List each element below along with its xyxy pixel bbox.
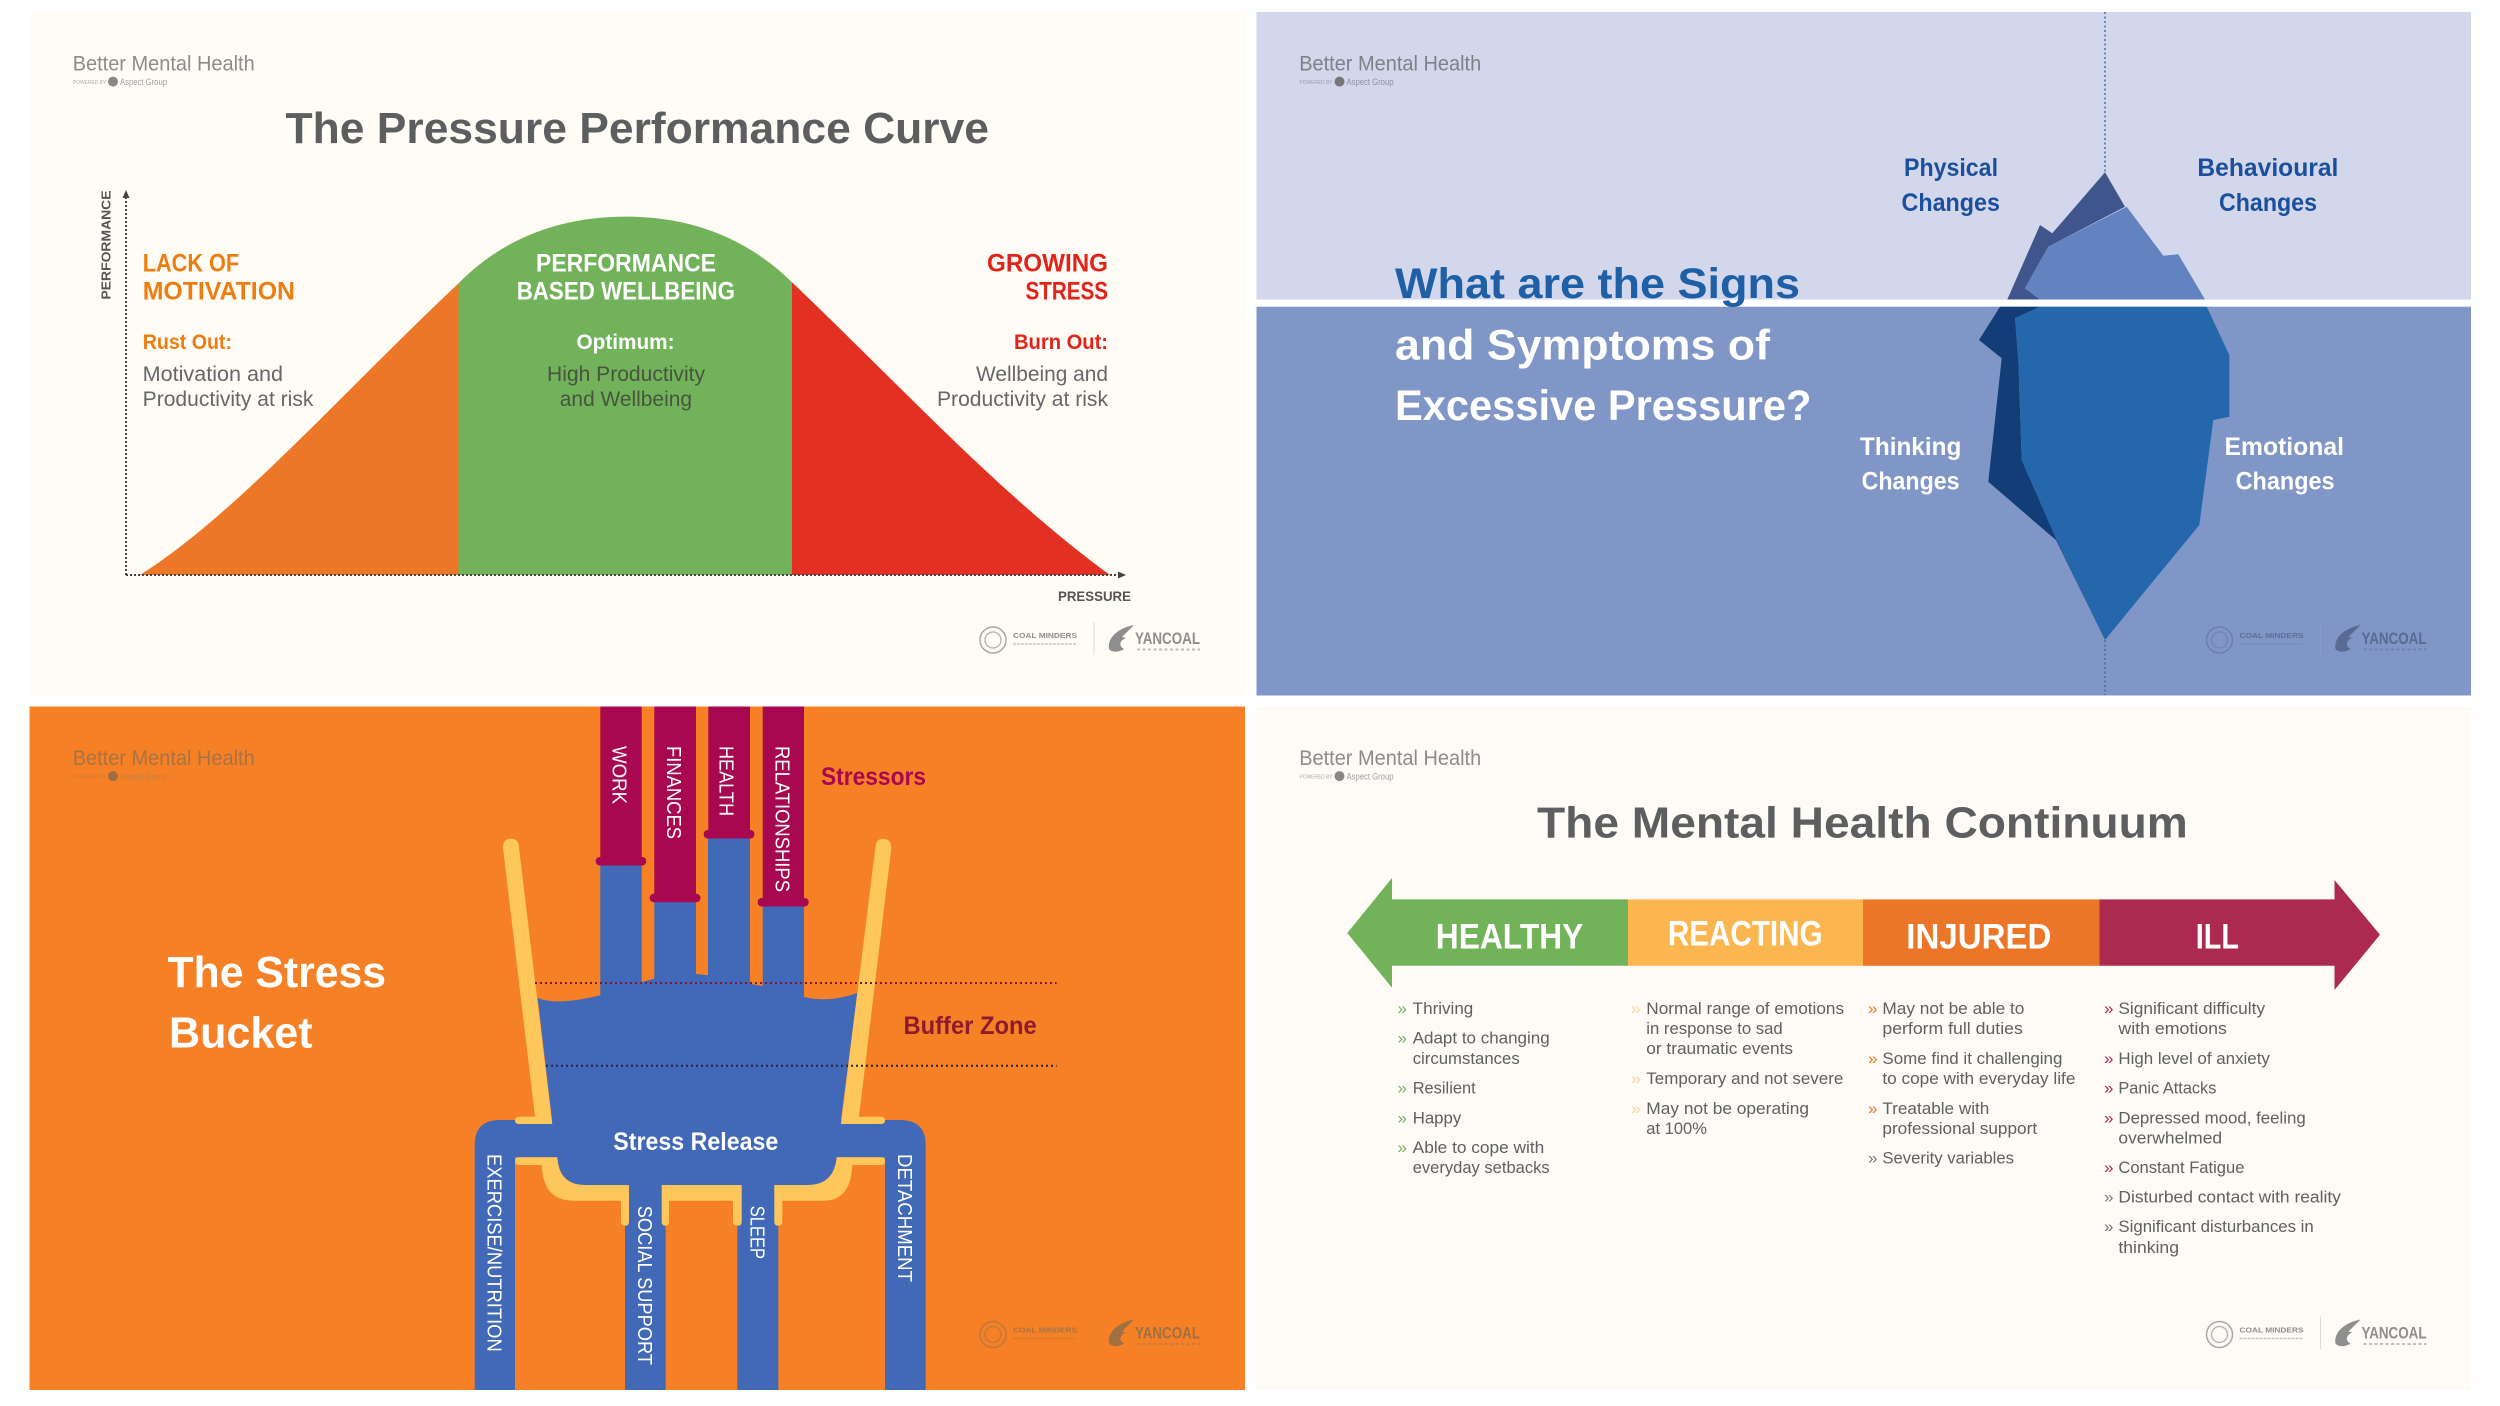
text block: lack of motivation: Motivation and xyxy=(143,363,283,386)
segment: reacting xyxy=(1628,899,1863,966)
brand header xyxy=(73,53,255,87)
segment: injured: INJURED xyxy=(1906,917,2051,956)
dotted vertical axis xyxy=(2104,12,2106,695)
label: behavioural changes xyxy=(2197,154,2338,217)
list: ill: » xyxy=(2104,1108,2113,1127)
brand header: POWERED BY xyxy=(1300,80,1333,86)
label: physical changes: Physical xyxy=(1904,154,1998,182)
list: ill: Depressed mood, feeling xyxy=(2118,1108,2306,1127)
list: ill xyxy=(2104,999,2341,1257)
text block: performance based wellbeing: BASED WELLBEING xyxy=(517,278,735,306)
release labels: EXERCISE/NUTRITION xyxy=(483,1154,505,1352)
continuum arrow xyxy=(1347,878,2380,990)
brand header: Better Mental Health xyxy=(73,747,255,770)
release labels: SLEEP xyxy=(746,1206,768,1259)
partner logos: YANCOAL xyxy=(2362,1324,2426,1342)
text block: lack of motivation: MOTIVATION xyxy=(143,278,295,306)
list: injured: Some find it challenging xyxy=(1882,1049,2062,1068)
iceberg illustration xyxy=(1979,172,2229,640)
list: healthy: everyday setbacks xyxy=(1413,1158,1550,1177)
list: injured: » xyxy=(1868,1148,1877,1168)
list: healthy: » xyxy=(1398,1028,1407,1047)
label: emotional changes: Emotional xyxy=(2224,433,2344,461)
list: ill: » xyxy=(2104,1049,2113,1068)
label: thinking changes: Changes xyxy=(1862,468,1960,496)
list: injured: to cope with everyday life xyxy=(1882,1069,2075,1088)
partner logos xyxy=(980,622,1200,655)
title xyxy=(1395,260,1811,430)
brand header: Aspect Group xyxy=(1346,772,1394,782)
list: reacting: Normal range of emotions xyxy=(1646,999,1844,1018)
text block: performance based wellbeing xyxy=(517,249,735,411)
list: ill: overwhelmed xyxy=(2118,1128,2222,1147)
text block: lack of motivation: LACK OF xyxy=(143,249,239,277)
list: injured: Treatable with xyxy=(1882,1099,1989,1118)
title: and Symptoms of xyxy=(1395,322,1771,370)
list: ill: » xyxy=(2104,1078,2113,1097)
list: ill: » xyxy=(2104,999,2113,1018)
list: ill: Panic Attacks xyxy=(2118,1078,2216,1097)
brand header: Better Mental Health xyxy=(1299,747,1481,770)
list: injured: perform full duties xyxy=(1882,1019,2023,1038)
pipe: relationships: RELATIONSHIPS xyxy=(771,746,793,892)
list: reacting: in response to sad xyxy=(1646,1019,1783,1038)
panel: pressure performance curve xyxy=(30,12,1245,696)
list: ill: » xyxy=(2104,1188,2113,1206)
text block: growing stress: STRESS xyxy=(1026,278,1108,306)
brand header: Better Mental Health xyxy=(1299,53,1481,76)
text block: growing stress xyxy=(937,249,1108,411)
partner logos xyxy=(2206,622,2426,655)
title: The Mental Health Continuum xyxy=(1537,798,2188,848)
segment: reacting: REACTING xyxy=(1668,915,1823,954)
pipe: work xyxy=(596,706,646,866)
list: reacting: Temporary and not severe xyxy=(1646,1069,1843,1088)
brand header: POWERED BY xyxy=(1300,774,1333,780)
partner logos: COAL MINDERS xyxy=(2240,1326,2304,1334)
text block: lack of motivation: Productivity at risk xyxy=(143,388,314,411)
brand header: Aspect Group xyxy=(120,77,167,87)
label: emotional changes: Changes xyxy=(2236,468,2335,496)
list: ill: » xyxy=(2104,1217,2113,1236)
list: healthy: Thriving xyxy=(1413,999,1473,1018)
partner logos: YANCOAL xyxy=(1135,629,1200,648)
label: stressors: Stressors xyxy=(821,763,926,791)
label: thinking changes: Thinking xyxy=(1860,433,1961,461)
list: healthy: » xyxy=(1398,1108,1407,1127)
list: healthy xyxy=(1398,999,1550,1177)
brand header: POWERED BY xyxy=(73,80,107,86)
label: physical changes: Changes xyxy=(1902,189,2000,217)
list: healthy: circumstances xyxy=(1413,1049,1520,1068)
text block: lack of motivation xyxy=(143,249,314,411)
release labels: SOCIAL SUPPORT xyxy=(633,1206,655,1365)
text block: performance based wellbeing: PERFORMANCE xyxy=(536,249,716,277)
title: Bucket xyxy=(169,1008,313,1057)
list: ill: Constant Fatigue xyxy=(2118,1158,2244,1177)
text block: performance based wellbeing: High Productivity xyxy=(547,363,706,386)
brand header: POWERED BY xyxy=(73,774,107,780)
title: Excessive Pressure? xyxy=(1395,382,1811,430)
panel: stress bucket xyxy=(30,706,1245,1390)
bucket walls xyxy=(503,839,891,1226)
list: healthy: Happy xyxy=(1413,1108,1462,1127)
text block: performance based wellbeing: Optimum: xyxy=(576,331,674,354)
pipe: relationships xyxy=(758,706,809,906)
list: ill: with emotions xyxy=(2117,1019,2227,1038)
list: reacting: or traumatic events xyxy=(1646,1039,1793,1058)
label: stress release: Stress Release xyxy=(613,1128,778,1156)
brand header: Aspect Group xyxy=(120,772,167,782)
title: The Stress xyxy=(168,948,386,997)
list: ill: thinking xyxy=(2118,1238,2179,1257)
buffer zone lines xyxy=(535,983,1057,1066)
list: healthy: » xyxy=(1398,1138,1407,1157)
title: The Pressure Performance Curve xyxy=(286,104,989,153)
list: healthy: » xyxy=(1398,999,1407,1018)
label: thinking changes xyxy=(1860,433,1961,496)
list: injured: » xyxy=(1868,999,1877,1018)
panel: iceberg signs and symptoms xyxy=(1256,12,2471,696)
text block: lack of motivation: Rust Out: xyxy=(143,331,232,354)
segment: ill: ILL xyxy=(2196,917,2239,956)
brand header xyxy=(1299,53,1481,87)
list: ill: High level of anxiety xyxy=(2118,1049,2270,1068)
segment: healthy xyxy=(1347,878,1628,988)
brand header xyxy=(1299,747,1481,782)
partner logos xyxy=(2206,1316,2426,1350)
text block: growing stress: Productivity at risk xyxy=(937,388,1108,411)
label: behavioural changes: Behavioural xyxy=(2197,154,2338,182)
pipe: finances: FINANCES xyxy=(662,746,684,839)
stressor pipes xyxy=(596,706,809,906)
label: physical changes xyxy=(1902,154,2000,217)
axis label: pressure: PRESSURE xyxy=(1058,588,1131,604)
pipe: health: HEALTH xyxy=(715,746,737,816)
list: injured: » xyxy=(1868,1049,1877,1068)
list: reacting: May not be operating xyxy=(1646,1099,1809,1118)
list: injured: professional support xyxy=(1882,1119,2037,1138)
list: injured: Severity variables xyxy=(1882,1148,2014,1168)
list: healthy: Adapt to changing xyxy=(1413,1028,1550,1047)
release labels: DETACHMENT xyxy=(893,1154,915,1282)
brand header: Aspect Group xyxy=(1346,77,1394,87)
partner logos: COAL MINDERS xyxy=(1013,1326,1077,1334)
list: healthy: Resilient xyxy=(1413,1078,1476,1097)
list: ill: Significant disturbances in xyxy=(2118,1217,2314,1236)
list: ill: Significant difficulty xyxy=(2118,999,2266,1018)
segment: injured xyxy=(1863,899,2099,966)
label: emotional changes xyxy=(2224,433,2344,496)
list: injured: » xyxy=(1868,1099,1877,1118)
partner logos xyxy=(980,1316,1200,1350)
chart: bell curve xyxy=(140,217,1110,575)
list: healthy: » xyxy=(1398,1078,1407,1097)
axis label: performance: PERFORMANCE xyxy=(98,190,114,300)
list: reacting: » xyxy=(1631,1099,1641,1118)
text block: growing stress: Wellbeing and xyxy=(976,363,1108,386)
list: ill: » xyxy=(2104,1158,2113,1177)
axes xyxy=(122,190,1126,578)
list: reacting: at 100% xyxy=(1646,1119,1707,1138)
bucket water and release outlets xyxy=(475,835,926,1390)
partner logos: COAL MINDERS xyxy=(1013,631,1077,640)
partner logos: YANCOAL xyxy=(1135,1324,1200,1342)
list: reacting: » xyxy=(1631,999,1641,1018)
pipe: health xyxy=(704,706,754,838)
brand header: Better Mental Health xyxy=(73,53,255,76)
segment: ill xyxy=(2099,880,2380,990)
list: reacting xyxy=(1631,999,1844,1138)
list: ill: Disturbed contact with reality xyxy=(2118,1188,2341,1206)
text block: growing stress: GROWING xyxy=(987,249,1108,277)
segment: healthy: HEALTHY xyxy=(1436,917,1583,956)
list: injured xyxy=(1868,999,2075,1168)
partner logos: COAL MINDERS xyxy=(2240,631,2304,640)
title xyxy=(168,948,386,1057)
label: buffer zone: Buffer Zone xyxy=(904,1012,1037,1040)
partner logos: YANCOAL xyxy=(2362,629,2426,648)
panel: mental health continuum xyxy=(1256,706,2471,1390)
text block: performance based wellbeing: and Wellbeing xyxy=(560,388,692,411)
label: behavioural changes: Changes xyxy=(2219,189,2317,217)
list: healthy: Able to cope with xyxy=(1413,1138,1544,1157)
pipe: finances xyxy=(650,706,700,902)
list: injured: May not be able to xyxy=(1882,999,2024,1018)
title: What are the Signs xyxy=(1395,260,1800,308)
list: reacting: » xyxy=(1631,1069,1641,1088)
pipe: work: WORK xyxy=(607,746,629,805)
brand header xyxy=(73,747,255,782)
text block: growing stress: Burn Out: xyxy=(1014,331,1108,354)
release labels xyxy=(483,1154,915,1365)
